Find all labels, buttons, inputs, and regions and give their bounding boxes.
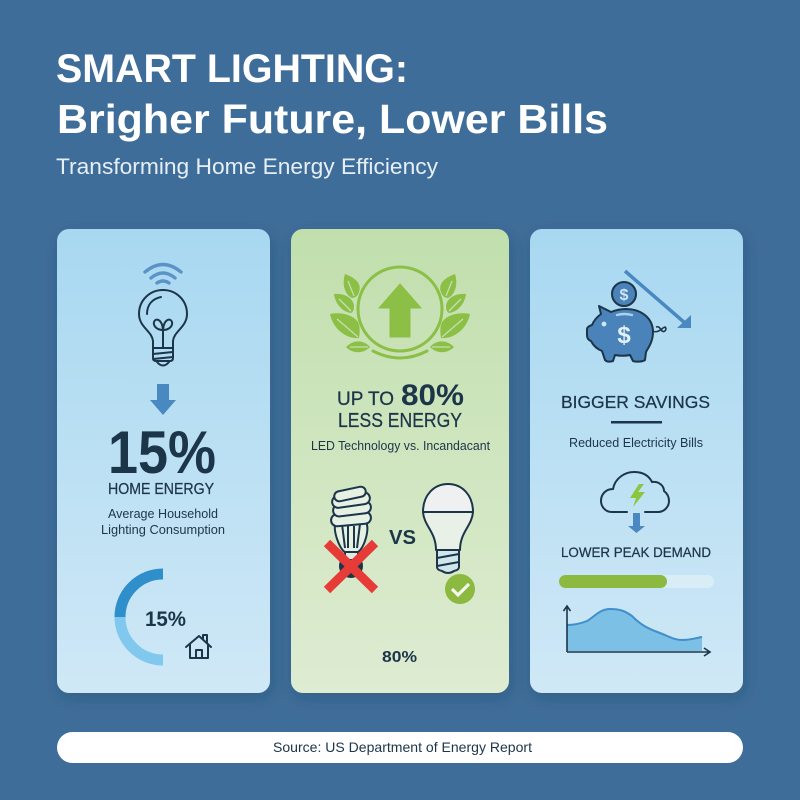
- icon: laurel with up arrow: [330, 267, 470, 358]
- icon: house: [186, 635, 211, 658]
- label: home energy: HOME ENERGY: [108, 481, 214, 498]
- divider: [611, 421, 662, 424]
- description: [101, 506, 225, 537]
- progress bar: [559, 575, 714, 588]
- source bar: Source: US Department of Energy Report: [273, 740, 532, 755]
- heading: up to 80% less energy: LESS ENERGY: [338, 410, 462, 432]
- chart: demand curve: [564, 606, 710, 656]
- donut value: 15%: [145, 608, 186, 631]
- subtitle: Transforming Home Energy Efficiency: [56, 154, 439, 179]
- heading: lower peak demand: LOWER PEAK DEMAND: [561, 544, 711, 560]
- icon: wifi signal: [145, 264, 181, 283]
- icon: cloud with bolt: [601, 472, 669, 512]
- vs label: VS: [389, 527, 416, 549]
- icon: piggy bank: $: [617, 322, 631, 349]
- heading: bigger savings: BIGGER SAVINGS: [561, 392, 710, 412]
- icon: CFL bulb crossed out: [327, 486, 375, 590]
- red cross: [327, 543, 375, 590]
- description: Average Household: [108, 506, 218, 521]
- description: Reduced Electricity Bills: [569, 435, 703, 450]
- icon: LED bulb: [423, 484, 473, 573]
- icon: piggy bank: [587, 282, 666, 362]
- arrow: down: [150, 384, 176, 415]
- description: Lighting Consumption: [101, 522, 225, 537]
- source bar: [57, 732, 743, 763]
- title: Brigher Future, Lower Bills: [57, 96, 608, 142]
- stat: 15%: 15%: [108, 419, 216, 486]
- icon: light bulb: [139, 290, 187, 366]
- heading: up to 80% less energy: UP TO: [337, 389, 394, 410]
- panel: less energy: [291, 229, 509, 693]
- icon: piggy bank: $: [620, 287, 629, 304]
- arrow: savings trend: [625, 271, 691, 328]
- heading: up to 80% less energy: 80%: [401, 379, 464, 412]
- label: 80%: 80%: [382, 649, 417, 666]
- panel: bigger savings: [530, 229, 743, 693]
- heading: up to 80% less energy: [337, 379, 464, 432]
- chart: donut: [120, 574, 163, 660]
- icon: check badge: [445, 574, 475, 604]
- title: SMART LIGHTING:: [56, 47, 408, 91]
- title: [56, 47, 608, 142]
- description: LED Technology vs. Incandacant: [311, 439, 491, 453]
- arrow: peak down: [628, 513, 645, 533]
- panel: home energy: [57, 229, 270, 693]
